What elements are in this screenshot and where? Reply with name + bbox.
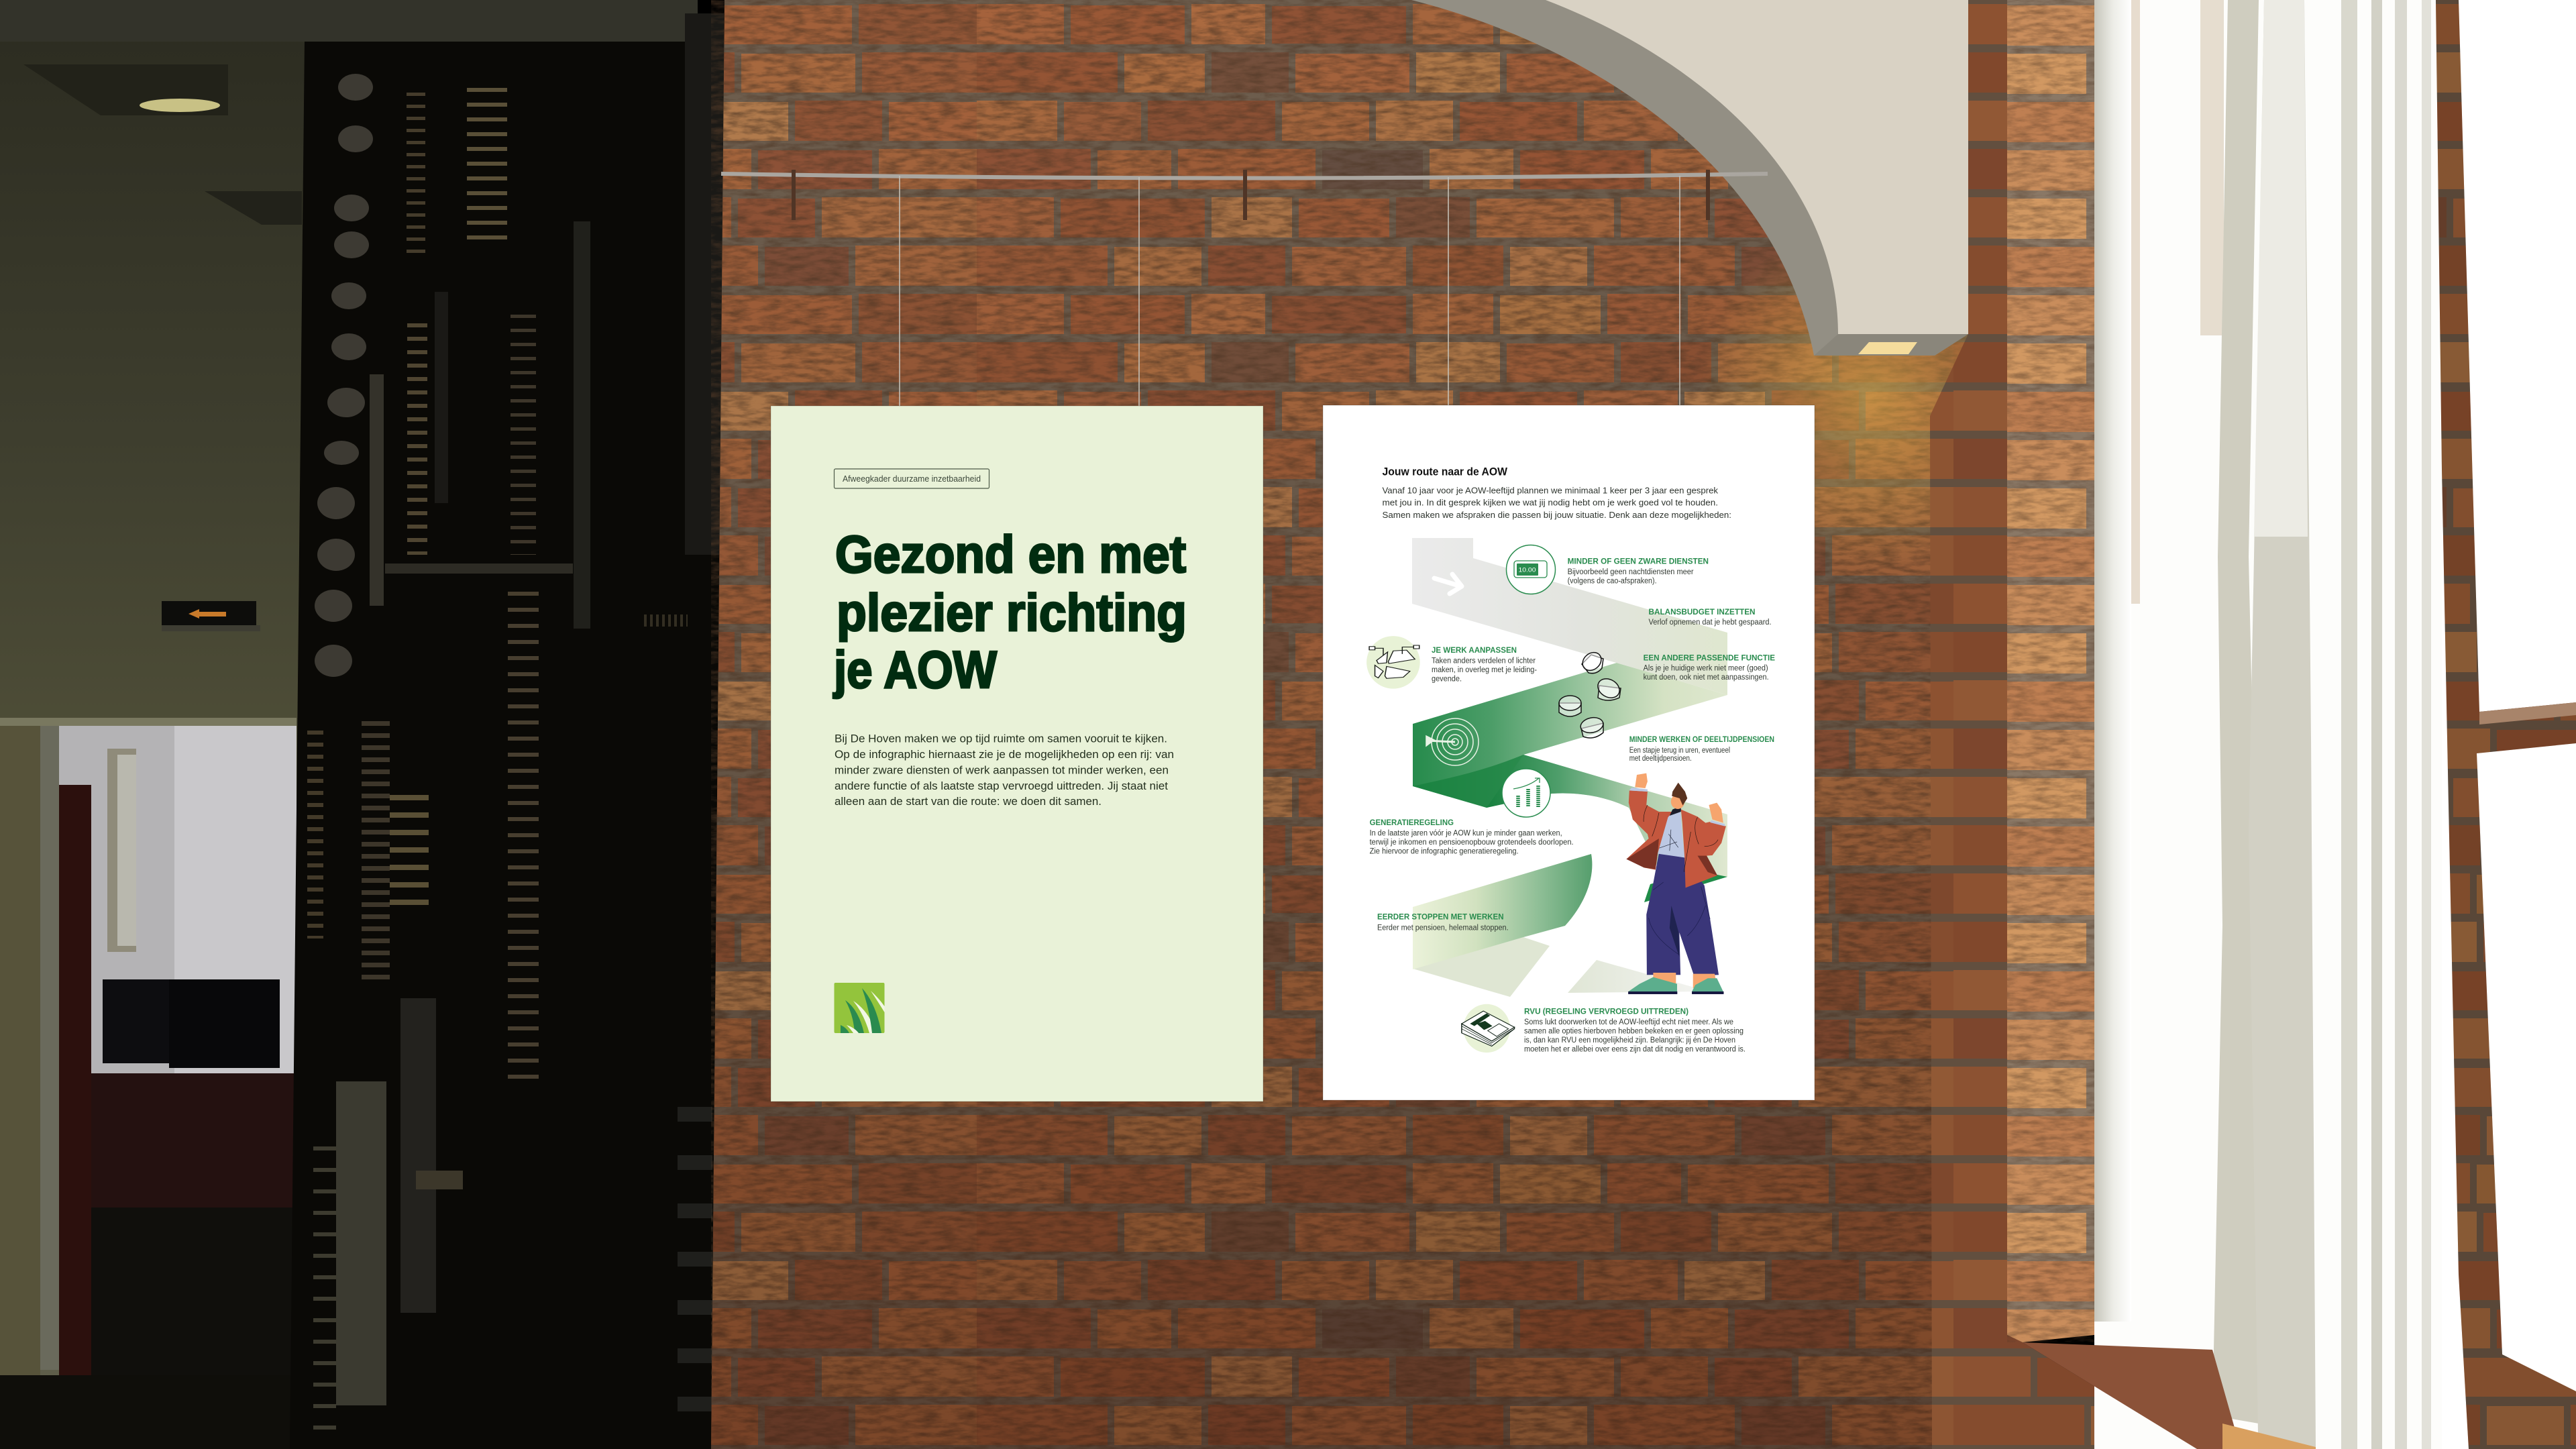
route ribbon <box>1412 538 1727 997</box>
right window with bricks <box>2436 0 2576 1449</box>
label: generatieregeling: GENERATIEREGELING <box>1370 819 1454 827</box>
icon: coin stacks with growth arrow <box>1502 769 1550 817</box>
intro paragraph: alleen aan de start van die route: we doen dit samen. <box>835 795 1102 808</box>
intro paragraph <box>835 733 1174 808</box>
label: je werk aanpassen: maken, in overleg met je leiding- <box>1432 666 1537 674</box>
label: rvu: RVU (REGELING VERVROEGD UITTREDEN) <box>1524 1008 1688 1016</box>
label: rvu <box>1524 1008 1746 1054</box>
poster: route infographic <box>1323 405 1815 1100</box>
label: minder werken of deeltijdpensioen: met deeltijdpensioen. <box>1629 755 1692 763</box>
logo <box>835 983 884 1033</box>
curtains <box>2023 0 2443 1449</box>
label: je werk aanpassen <box>1432 647 1537 684</box>
title: je AOW <box>833 640 997 699</box>
intro text <box>1382 485 1731 520</box>
icon: pie pieces <box>1366 636 1420 689</box>
dark machinery wall <box>290 13 728 1449</box>
icon: paper stack <box>1462 1004 1515 1053</box>
label: je werk aanpassen: JE WERK AANPASSEN <box>1432 647 1517 655</box>
intro text: Vanaf 10 jaar voor je AOW-leeftijd plannen we minimaal 1 keer per 3 jaar een gesprek <box>1382 485 1719 495</box>
label: generatieregeling: terwijl je inkomen en pensioenopbouw grotendeels doorlopen. <box>1370 839 1574 847</box>
label: generatieregeling: In de laatste jaren vóór je AOW kun je minder gaan werken, <box>1370 829 1562 837</box>
label: minder of geen zware diensten: (volgens de cao-afspraken). <box>1568 577 1657 585</box>
icon: alarm clock: 10.00 <box>1519 566 1536 573</box>
label: minder werken of deeltijdpensioen: Een stapje terug in uren, eventueel <box>1629 747 1730 755</box>
heading: Jouw route naar de AOW <box>1382 466 1507 478</box>
brick wall <box>711 0 2046 1449</box>
label: een andere passende functie: kunt doen, ook niet met aanpassingen. <box>1644 674 1769 682</box>
intro text: met jou in. In dit gesprek kijken we wat jij nodig hebt om je werk goed vol te houden. <box>1382 498 1718 508</box>
label: eerder stoppen met werken: Eerder met pensioen, helemaal stoppen. <box>1377 924 1509 932</box>
icon: route arrow <box>1434 574 1462 594</box>
intro paragraph: andere functie of als laatste stap vervroegd uittreden. Jij staat niet <box>835 780 1168 792</box>
title: plezier richting <box>837 583 1187 642</box>
intro paragraph: Bij De Hoven maken we op tijd ruimte om samen vooruit te kijken. <box>835 733 1167 745</box>
label: een andere passende functie: EEN ANDERE PASSENDE FUNCTIE <box>1644 654 1775 662</box>
label: een andere passende functie <box>1644 654 1775 682</box>
hanging rail and wires <box>721 170 1768 407</box>
tag: document type <box>835 469 989 488</box>
tag: document type: Afweegkader duurzame inzetbaarheid <box>843 474 981 484</box>
icon: target with dart <box>1426 718 1479 765</box>
label: balansbudget inzetten: BALANSBUDGET INZETTEN <box>1649 608 1755 616</box>
plaster arch with light fixture <box>1411 0 1968 356</box>
poster: cover <box>771 406 1263 1102</box>
label: je werk aanpassen: Taken anders verdelen of lichter <box>1432 657 1536 665</box>
label: minder werken of deeltijdpensioen <box>1629 736 1774 763</box>
intro paragraph: minder zware diensten of werk aanpassen tot minder werken, een <box>835 763 1169 776</box>
title <box>833 525 1187 699</box>
label: generatieregeling <box>1370 819 1574 856</box>
label: balansbudget inzetten: Verlof opnemen dat je hebt gespaard. <box>1649 619 1771 627</box>
icon: coins <box>1559 649 1623 738</box>
label: rvu: Soms lukt doorwerken tot de AOW-leeftijd echt niet meer. Als we <box>1524 1018 1733 1026</box>
label: minder of geen zware diensten: MINDER OF GEEN ZWARE DIENSTEN <box>1568 558 1709 566</box>
label: minder of geen zware diensten <box>1568 558 1709 585</box>
label: rvu: is, dan kan RVU een mogelijkheid zijn. Belangrijk: jij én De Hoven <box>1524 1036 1735 1044</box>
intro text: Samen maken we afspraken die passen bij jouw situatie. Denk aan deze mogelijkheden: <box>1382 510 1731 520</box>
label: eerder stoppen met werken <box>1377 914 1509 932</box>
label: balansbudget inzetten <box>1649 608 1771 627</box>
label: minder werken of deeltijdpensioen: MINDER WERKEN OF DEELTIJDPENSIOEN <box>1629 736 1774 744</box>
label: minder of geen zware diensten: Bijvoorbeeld geen nachtdiensten meer <box>1568 568 1694 576</box>
label: je werk aanpassen: gevende. <box>1432 676 1462 684</box>
brick pier and window frame <box>1930 0 2197 1449</box>
label: generatieregeling: Zie hiervoor de infographic generatieregeling. <box>1370 848 1519 856</box>
illustration: cheering person <box>1626 773 1726 994</box>
icon: alarm clock <box>1507 545 1555 594</box>
left interior wall with doorway <box>0 0 698 1449</box>
label: eerder stoppen met werken: EERDER STOPPEN MET WERKEN <box>1377 914 1504 922</box>
label: rvu: moeten het er allebei over eens zijn dat dit nodig en verantwoord is. <box>1524 1046 1746 1054</box>
title: Gezond en met <box>835 525 1186 584</box>
label: rvu: samen alle opties hierboven hebben bekeken en er geen oplossing <box>1524 1028 1743 1036</box>
label: een andere passende functie: Als je je huidige werk niet meer (goed) <box>1644 665 1768 673</box>
intro paragraph: Op de infographic hiernaast zie je de mogelijkheden op een rij: van <box>835 748 1174 761</box>
